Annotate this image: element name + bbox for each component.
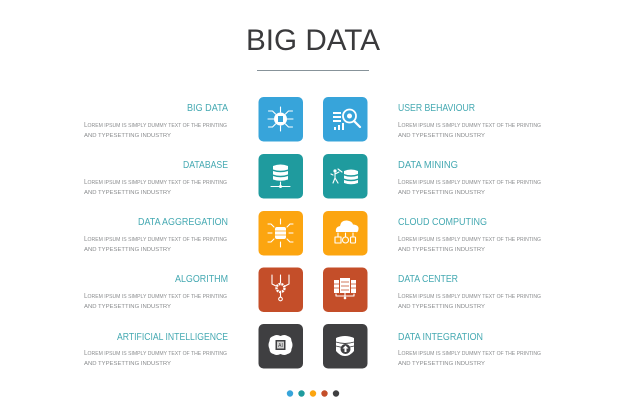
panel: cloud computing text: AND TYPESETTING INDUSTRY: [398, 247, 485, 253]
panel: big data text: BIG DATA: [187, 102, 228, 114]
panel: algorithm text: ALGORITHM: [175, 273, 228, 285]
panel: big data text: LOREM IPSUM IS SIMPLY DUMMY TEXT OF THE PRINTING: [84, 122, 227, 129]
icon: data aggregation: [258, 211, 303, 256]
panel: data center text: [398, 273, 541, 310]
icon: artificial intelligence brain: [258, 324, 303, 368]
panel: algorithm text: LOREM IPSUM IS SIMPLY DUMMY TEXT OF THE PRINTING: [84, 293, 227, 300]
panel: data center text: DATA CENTER: [398, 273, 458, 285]
panel: data mining text: LOREM IPSUM IS SIMPLY DUMMY TEXT OF THE PRINTING: [398, 179, 541, 186]
panel: algorithm text: AND TYPESETTING INDUSTRY: [84, 304, 171, 310]
title underline: [257, 70, 369, 71]
panel: database text: AND TYPESETTING INDUSTRY: [84, 190, 171, 196]
icon: data integration: [323, 324, 368, 368]
panel: data aggregation text: AND TYPESETTING INDUSTRY: [84, 247, 171, 253]
panel: data mining text: [398, 159, 541, 196]
panel: data integration text: LOREM IPSUM IS SIMPLY DUMMY TEXT OF THE PRINTING: [398, 350, 541, 357]
panel: database text: LOREM IPSUM IS SIMPLY DUMMY TEXT OF THE PRINTING: [84, 179, 227, 186]
panel: database text: DATABASE: [183, 159, 228, 171]
panel: artificial intelligence text: AND TYPESETTING INDUSTRY: [84, 361, 171, 367]
panel: cloud computing text: CLOUD COMPUTING: [398, 216, 487, 228]
panel: cloud computing text: [398, 216, 541, 253]
icon: data center servers: [323, 268, 368, 312]
panel: big data text: AND TYPESETTING INDUSTRY: [84, 133, 171, 139]
panel: cloud computing text: LOREM IPSUM IS SIMPLY DUMMY TEXT OF THE PRINTING: [398, 236, 541, 243]
panel: data mining text: DATA MINING: [398, 159, 458, 171]
icon: cloud computing: [323, 211, 368, 256]
panel: data aggregation text: DATA AGGREGATION: [138, 216, 228, 228]
icon: user behaviour magnifier: [323, 97, 368, 142]
icon: database network: [258, 154, 303, 198]
panel: user behaviour text: AND TYPESETTING INDUSTRY: [398, 133, 485, 139]
title: BIG DATA: [246, 24, 380, 57]
panel: data integration text: AND TYPESETTING INDUSTRY: [398, 361, 485, 367]
panel: big data text: [84, 102, 228, 139]
panel: artificial intelligence text: LOREM IPSUM IS SIMPLY DUMMY TEXT OF THE PRINTING: [84, 350, 227, 357]
icon: artificial intelligence brain: AI: [278, 343, 283, 349]
panel: user behaviour text: USER BEHAVIOUR: [398, 102, 475, 114]
panel: artificial intelligence text: [84, 331, 228, 367]
panel: user behaviour text: LOREM IPSUM IS SIMPLY DUMMY TEXT OF THE PRINTING: [398, 122, 541, 129]
panel: user behaviour text: [398, 102, 541, 139]
panel: data center text: LOREM IPSUM IS SIMPLY DUMMY TEXT OF THE PRINTING: [398, 293, 541, 300]
panel: data aggregation text: [84, 216, 228, 253]
icon: big data hub: [258, 97, 303, 142]
panel: algorithm text: [84, 273, 228, 310]
panel: data integration text: [398, 331, 541, 367]
panel: database text: [84, 159, 228, 196]
icon: data mining miner and database: [323, 154, 368, 198]
panel: artificial intelligence text: ARTIFICIAL INTELLIGENCE: [117, 331, 228, 343]
panel: data integration text: DATA INTEGRATION: [398, 331, 483, 343]
pagination dots: [287, 390, 339, 397]
icon: algorithm gear: [258, 268, 303, 312]
panel: data center text: AND TYPESETTING INDUSTRY: [398, 304, 485, 310]
panel: data aggregation text: LOREM IPSUM IS SIMPLY DUMMY TEXT OF THE PRINTING: [84, 236, 227, 243]
panel: data mining text: AND TYPESETTING INDUSTRY: [398, 190, 485, 196]
